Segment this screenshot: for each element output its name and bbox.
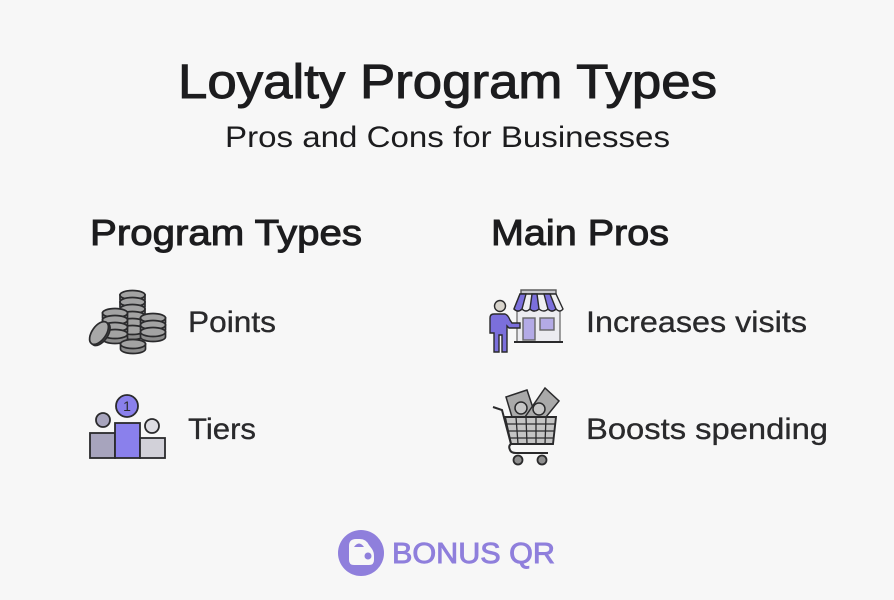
label: points: Points xyxy=(188,306,276,339)
icon: podium xyxy=(90,395,165,458)
heading: program types: Program Types xyxy=(90,212,362,253)
title: Loyalty Program Types xyxy=(178,56,717,109)
heading: main pros: Main Pros xyxy=(491,212,669,253)
label: boosts spending: Boosts spending xyxy=(586,413,828,446)
logo: bonus qr xyxy=(338,530,555,576)
icon: shopping cart with money xyxy=(493,388,559,464)
label: tiers: Tiers xyxy=(188,413,256,446)
icon: podium: 1 xyxy=(123,398,131,414)
subtitle: Pros and Cons for Businesses xyxy=(225,121,670,154)
logo: bonus qr: BONUS QR xyxy=(392,538,555,570)
icon: person at storefront xyxy=(490,290,563,352)
label: increases visits: Increases visits xyxy=(586,306,807,339)
icon: coin stacks xyxy=(86,290,166,354)
